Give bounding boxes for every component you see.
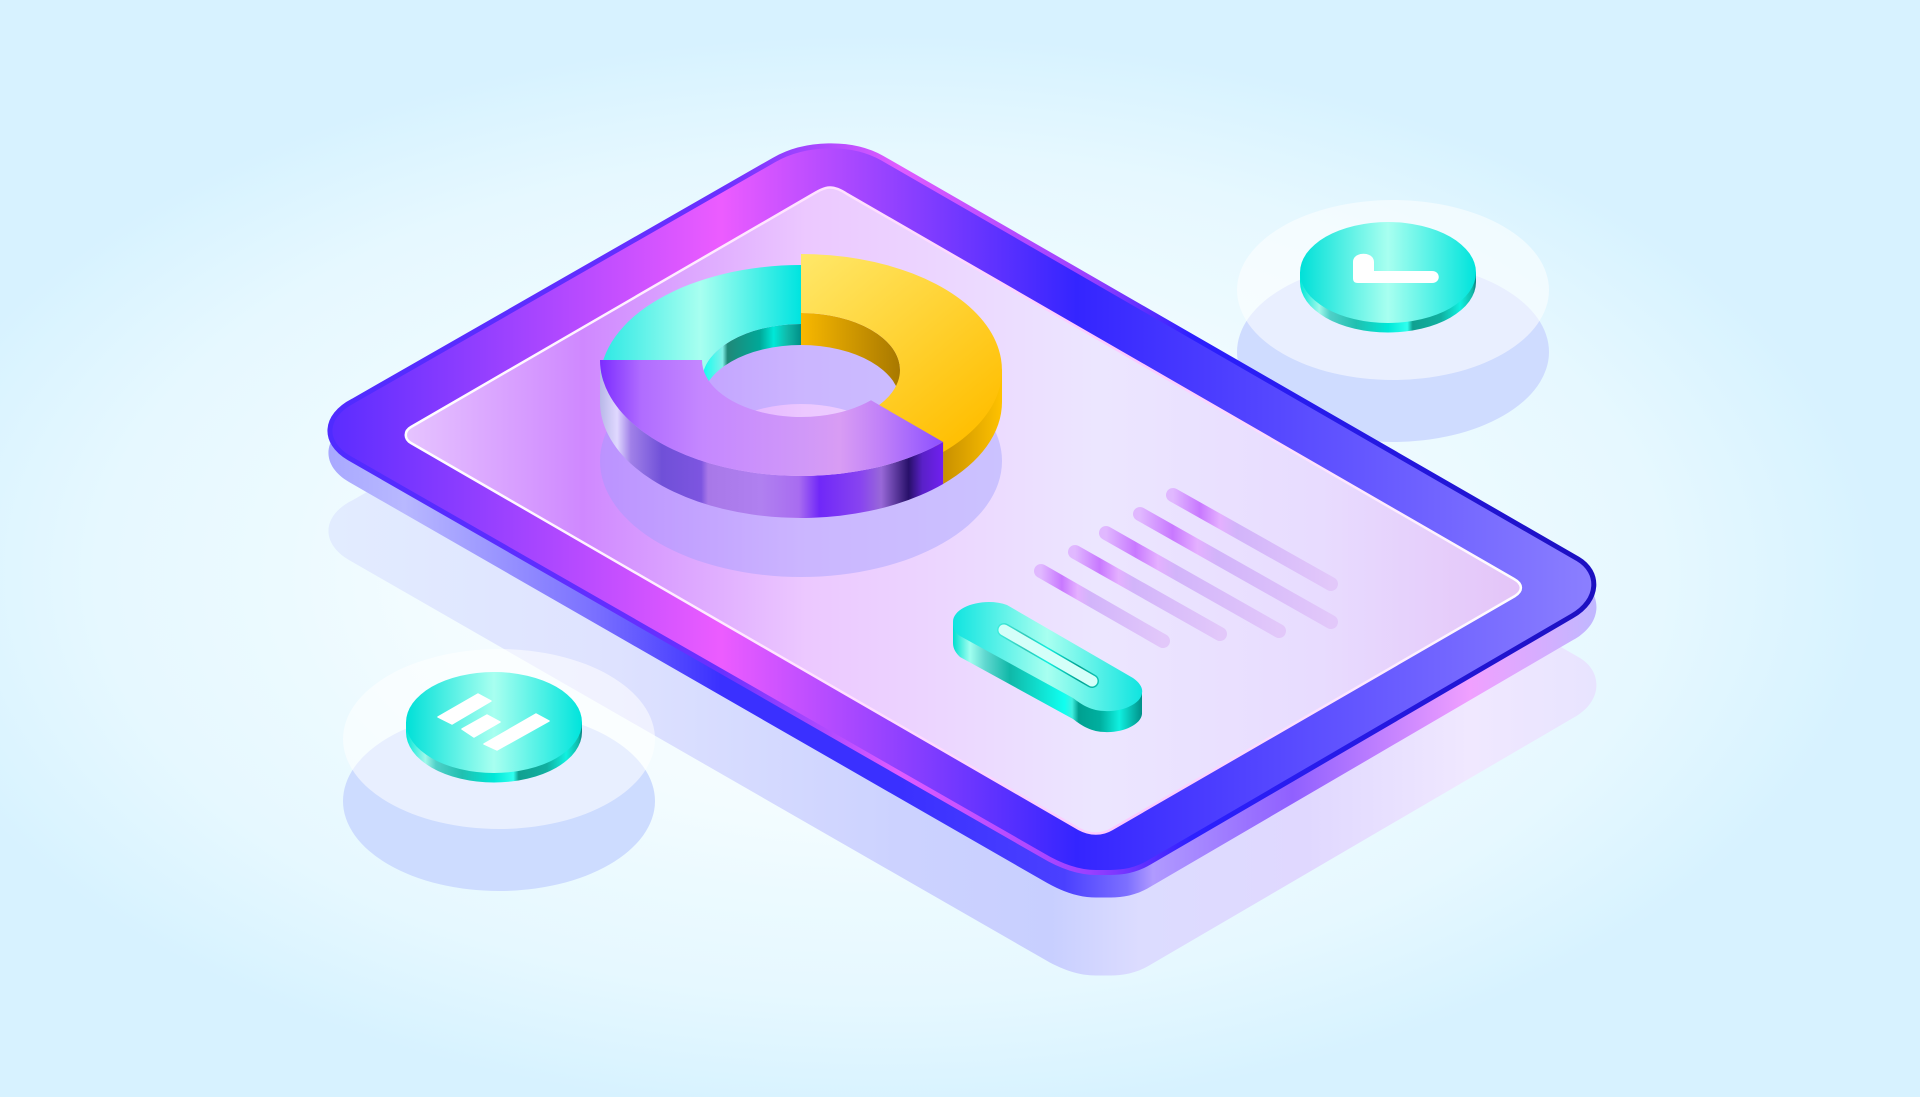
coin side [1300, 272, 1476, 332]
yellow segment top [801, 254, 1002, 452]
coin halo [343, 649, 655, 829]
pill slot outline [1004, 630, 1092, 681]
tablet bezel [330, 146, 1594, 873]
cyan segment inner wall [702, 324, 801, 402]
tablet [328, 146, 1596, 898]
pill top [953, 602, 1142, 711]
yellow segment inner wall [801, 313, 900, 402]
coin shadow [343, 711, 655, 891]
yellow segment side [943, 369, 1002, 484]
coin halo [1237, 200, 1549, 380]
coin side [406, 722, 582, 782]
coin top [1300, 222, 1476, 323]
pill slot centre [1004, 630, 1092, 681]
purple segment side [600, 360, 943, 518]
coin top [406, 672, 582, 773]
icon: clock hands [1353, 254, 1439, 283]
tablet ground shadow [328, 244, 1596, 976]
donut chart [600, 254, 1002, 577]
icon: bars [438, 694, 549, 750]
floating coin: clock icon [1237, 200, 1549, 442]
donut shadow [600, 345, 1002, 577]
pill side [953, 622, 1142, 732]
cyan segment top [600, 265, 801, 381]
purple segment top [600, 360, 943, 476]
coin shadow [1237, 262, 1549, 442]
text lines [1041, 495, 1331, 641]
tablet side [328, 166, 1596, 898]
floating coin: bars icon [343, 649, 655, 891]
pill button [953, 602, 1142, 732]
tablet screen [406, 188, 1521, 834]
